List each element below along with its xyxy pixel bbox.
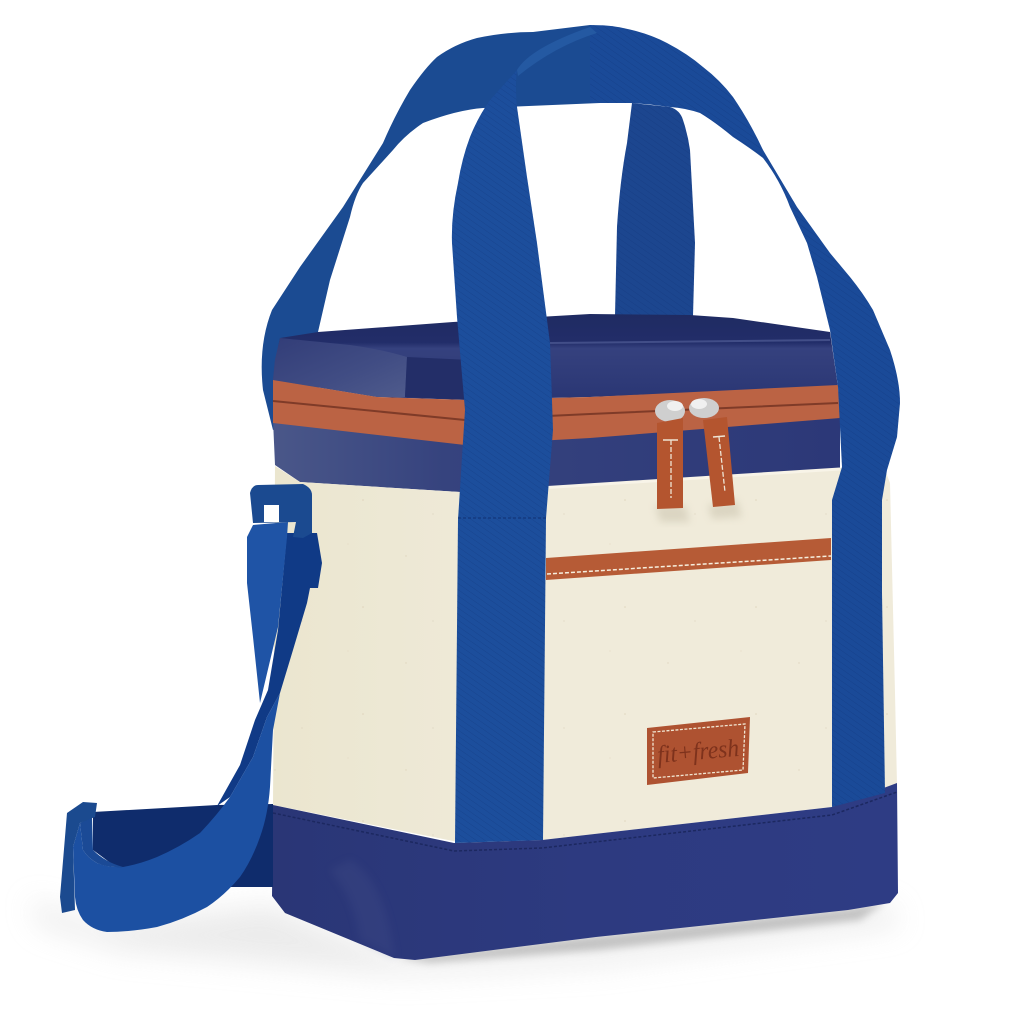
front pocket piping bbox=[546, 538, 831, 580]
strap curl layers bbox=[80, 817, 123, 867]
lower buckle bbox=[60, 802, 97, 913]
shoulder strap bbox=[60, 484, 322, 932]
upper strap bbox=[247, 522, 288, 703]
top slider buckle bbox=[250, 484, 312, 538]
cream canvas body bbox=[273, 466, 897, 843]
bag lid bbox=[273, 314, 838, 400]
leather brand patch: fit+fresh bbox=[656, 735, 740, 769]
rear strap, left arch bbox=[262, 25, 600, 430]
left zipper pull bbox=[655, 400, 685, 509]
leather brand patch bbox=[647, 717, 750, 785]
lower strap bbox=[73, 693, 280, 932]
right arch and strap panel bbox=[590, 25, 900, 807]
right zipper pull bbox=[689, 398, 735, 507]
navy lower lid band bbox=[273, 412, 840, 492]
front handle bbox=[452, 27, 597, 843]
back handle bbox=[615, 103, 695, 316]
zipper pulls bbox=[655, 398, 742, 522]
navy base bbox=[272, 783, 898, 960]
floor shadow bbox=[30, 900, 900, 975]
orange zipper band bbox=[273, 380, 840, 445]
strap inner fold bbox=[217, 533, 322, 806]
strap back section bbox=[93, 804, 273, 887]
